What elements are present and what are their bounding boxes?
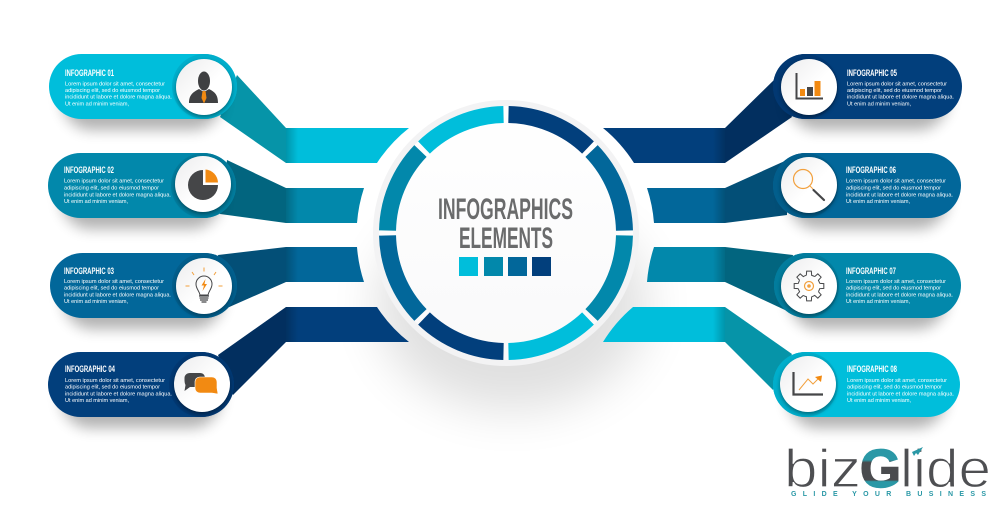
center circle drop shadow <box>377 200 647 410</box>
body text: Ut enim ad minim veniam, <box>847 398 911 404</box>
body text: Lorem ipsum dolor sit amet, consectetur <box>64 279 164 285</box>
body text: adipiscing elit, sed do eiusmod tempor <box>64 186 159 192</box>
body text: Ut enim ad minim veniam, <box>65 101 129 107</box>
body text <box>65 378 172 404</box>
body text: adipiscing elit, sed do eiusmod tempor <box>847 88 942 94</box>
icon: growth chart <box>794 372 823 394</box>
body text: incididunt ut labore et dolore magna aliqua. <box>846 292 953 298</box>
icon: chat bubbles <box>184 373 218 394</box>
logo: bizGlide <box>784 439 991 499</box>
ribbon 07 <box>647 247 793 310</box>
panel: infographic 01 <box>49 54 237 130</box>
body text: Ut enim ad minim veniam, <box>846 299 910 305</box>
body text: Ut enim ad minim veniam, <box>65 398 129 404</box>
body text <box>846 279 953 305</box>
title <box>438 193 573 255</box>
heading: INFOGRAPHIC 06 <box>846 165 896 176</box>
panel: infographic 07 <box>774 253 961 329</box>
body text: Ut enim ad minim veniam, <box>64 299 128 305</box>
icon: light bulb <box>186 268 222 302</box>
icon: bar chart <box>796 73 823 98</box>
heading: INFOGRAPHIC 04 <box>65 364 115 375</box>
body text: adipiscing elit, sed do eiusmod tempor <box>65 385 160 391</box>
heading: INFOGRAPHIC 01 <box>65 68 114 79</box>
icon: magnifying glass <box>794 170 824 200</box>
body text: Lorem ipsum dolor sit amet, consectetur <box>64 179 164 185</box>
colour squares <box>459 257 551 276</box>
heading: INFOGRAPHIC 07 <box>846 266 896 277</box>
icon: business person <box>189 72 218 104</box>
panel: infographic 06 <box>773 153 961 229</box>
ribbon 03 <box>218 247 364 308</box>
body text: adipiscing elit, sed do eiusmod tempor <box>64 286 159 292</box>
logo: bizGlide: G <box>860 439 901 499</box>
panel: infographic 03 <box>50 253 237 329</box>
body text: Ut enim ad minim veniam, <box>846 199 910 205</box>
icon: pie chart <box>188 170 218 200</box>
ribbon 04 <box>218 307 409 395</box>
logo tagline: GLIDE YOUR BUSINESS <box>791 491 986 498</box>
heading: INFOGRAPHIC 02 <box>64 165 114 176</box>
body text: adipiscing elit, sed do eiusmod tempor <box>846 186 941 192</box>
body text: Lorem ipsum dolor sit amet, consectetur <box>65 378 165 384</box>
logo: bizGlide: biz <box>784 439 861 499</box>
central circle <box>373 100 639 366</box>
ribbon 06 <box>647 160 787 223</box>
body text <box>847 378 954 404</box>
ribbon 01 <box>220 75 409 163</box>
panel: infographic 05 <box>773 54 962 130</box>
body text <box>846 179 953 205</box>
body text: incididunt ut labore et dolore magna aliqua. <box>847 391 954 397</box>
body text: incididunt ut labore et dolore magna aliqua. <box>65 95 172 101</box>
title: ELEMENTS <box>459 222 553 255</box>
logo: bizGlide: lide <box>900 439 991 499</box>
body text: Lorem ipsum dolor sit amet, consectetur <box>65 81 165 87</box>
body text: Lorem ipsum dolor sit amet, consectetur <box>846 279 946 285</box>
body text: incididunt ut labore et dolore magna aliqua. <box>65 391 172 397</box>
body text: Lorem ipsum dolor sit amet, consectetur <box>847 81 947 87</box>
heading: INFOGRAPHIC 08 <box>847 364 897 375</box>
body text: Ut enim ad minim veniam, <box>64 199 128 205</box>
body text <box>64 279 171 305</box>
body text: adipiscing elit, sed do eiusmod tempor <box>65 88 160 94</box>
body text: incididunt ut labore et dolore magna aliqua. <box>64 292 171 298</box>
icon: paper plane <box>912 447 923 456</box>
heading: INFOGRAPHIC 03 <box>64 266 114 277</box>
heading: INFOGRAPHIC 05 <box>847 68 897 79</box>
body text: adipiscing elit, sed do eiusmod tempor <box>847 385 942 391</box>
body text: adipiscing elit, sed do eiusmod tempor <box>846 286 941 292</box>
body text <box>847 81 954 107</box>
segmented ring <box>388 115 624 351</box>
panel: infographic 04 <box>48 352 234 428</box>
ribbon 02 <box>220 160 364 223</box>
panel: infographic 02 <box>48 153 236 229</box>
body text: incididunt ut labore et dolore magna aliqua. <box>847 95 954 101</box>
ribbon 08 <box>603 307 792 390</box>
title: INFOGRAPHICS <box>438 193 573 226</box>
panel: infographic 08 <box>773 352 960 428</box>
body text: incididunt ut labore et dolore magna aliqua. <box>846 192 953 198</box>
body text: incididunt ut labore et dolore magna aliqua. <box>64 192 171 198</box>
body text: Lorem ipsum dolor sit amet, consectetur <box>846 179 946 185</box>
icon: gear <box>794 271 824 301</box>
body text <box>65 81 172 107</box>
ribbon 05 <box>603 77 792 163</box>
body text <box>64 179 171 205</box>
body text: Lorem ipsum dolor sit amet, consectetur <box>847 378 947 384</box>
body text: Ut enim ad minim veniam, <box>847 101 911 107</box>
